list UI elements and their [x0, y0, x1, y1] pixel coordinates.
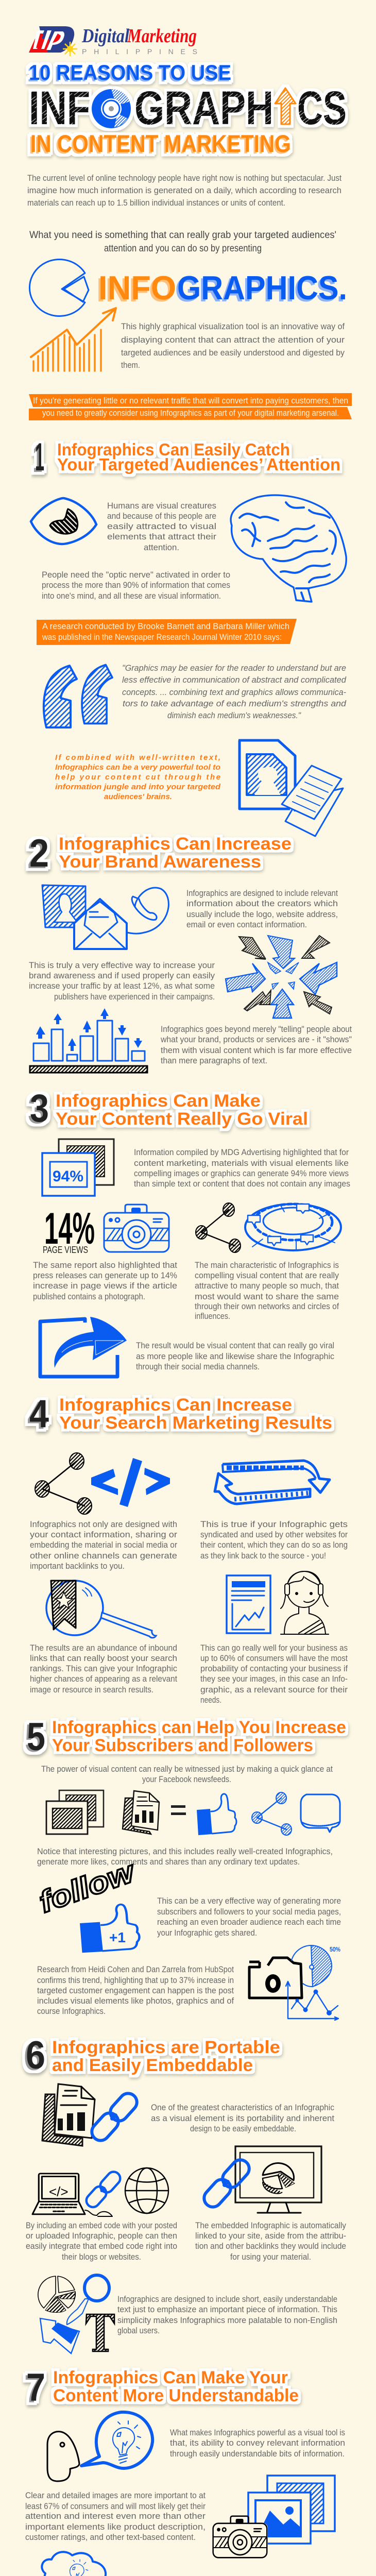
text: main characteristic: The main characteristic of Infographics is — [195, 1260, 339, 1270]
text: 67% of consumers: important elements like product description, — [25, 2522, 206, 2532]
text: goes beyond telling: Infographics goes beyond merely "telling" people about — [161, 1024, 352, 1034]
icon: share nodes — [35, 1453, 92, 1514]
text: optic nerve: process the more than 90% of information that comes — [42, 580, 230, 590]
text: 60% of consumers — [200, 1643, 348, 1705]
icon: blue line chart — [286, 1981, 338, 2020]
heading 3: Infographics Can Make — [56, 1091, 261, 1111]
text: automatically linked: tion and other backlinks they would include — [195, 2241, 346, 2251]
orange ribbon callout: If you're generating little or no relevant traffic that will convert into paying customers, then — [33, 396, 348, 405]
text: subscribers and followers: subscribers and followers to your social media pages, — [157, 1907, 341, 1917]
text: 60% of consumers: graphic, as a relevant source for their — [200, 1685, 348, 1694]
orange emphasis text: information jungle and into your targeted — [55, 783, 221, 791]
text: main characteristic: compelling visual content that are really — [195, 1270, 339, 1280]
icon: magnifier and bookmark — [46, 1581, 156, 1638]
number 4: 4 — [29, 1392, 49, 1436]
heading 7 — [53, 2368, 299, 2405]
heading 2: Your Brand Awareness — [59, 852, 261, 872]
text: humans are visual: easily attracted to visual — [107, 521, 216, 531]
section 3 — [30, 1087, 350, 1377]
text: relevant information: information about the creators which — [186, 899, 338, 908]
number 2: 2 — [29, 832, 49, 875]
text: research Heidi Cohen: confirms this trend, highlighting that up to 37% increase in — [37, 1975, 234, 1985]
text: brand awareness: brand awareness and if used properly can easily — [29, 971, 215, 980]
title line 3: IN CONTENT MARKETING — [30, 130, 291, 157]
heading 4: Infographics Can Increase — [59, 1395, 292, 1415]
icon: speech bubble with bulb — [81, 2412, 152, 2468]
text: embed code: or uploaded Infographic, people can then — [26, 2231, 177, 2241]
icon: chain link small — [83, 2169, 123, 2210]
text: press releases: increase in page views if the article — [33, 1281, 177, 1291]
text: press releases: published contains a photograph. — [33, 1292, 145, 1301]
text: MDG advertising: than simple text or content that does not contain any images — [134, 1179, 350, 1189]
icon: pie, magnifier, arrow and T — [38, 2275, 114, 2353]
heading 5: Your Subscribers and Followers — [52, 1736, 313, 1755]
text: inbound links: higher chances of appearing as a relevant — [30, 1674, 177, 1684]
intro text: imagine how much information is generated on a daily, which according to research — [27, 185, 341, 195]
text: humans are visual — [107, 501, 216, 552]
section 4 — [29, 1392, 348, 1705]
text: powerful visual tool: that, its ability to convey relevant information — [170, 2438, 345, 2448]
icon: 94% picture frames: 94% — [53, 1168, 83, 1185]
text: go viral result: The result would be visual content that can really go viral — [136, 1341, 334, 1350]
heading 3: Your Content Really Go Viral — [56, 1109, 308, 1129]
icon: thumbs up plus one — [80, 1905, 139, 1953]
stat: 14% page views: PAGE VIEWS — [43, 1245, 88, 1255]
text: backlinks: important backlinks to you. — [30, 1561, 125, 1571]
text: press releases: The same report also highlighted that — [33, 1260, 177, 1270]
text: MDG advertising: content marketing, materials with visual elements like — [134, 1158, 349, 1168]
text: portability: design to be easily embeddable. — [190, 2124, 296, 2133]
text: main characteristic: most would want to share the same — [195, 1292, 339, 1301]
stat: 14% page views: 14% — [44, 1204, 95, 1253]
heading 6 — [52, 2038, 280, 2075]
icon: follow lettering: follow — [35, 1854, 141, 1919]
title line 2: INFOGRAPHICS with icons: GRAPH — [134, 82, 274, 134]
logo: Digital Marketing Philippines — [29, 25, 197, 56]
text: 60% of consumers: This can go really well for your business as — [200, 1643, 348, 1653]
heading 2 — [59, 834, 292, 872]
text: powerful visual tool: through easily understandable bits of information. — [170, 2449, 345, 2459]
quote text: "Graphics may be easier for the reader to understand but are — [122, 663, 346, 673]
text: embed code: easily integrate that embed code right into — [26, 2241, 177, 2251]
heading 3 — [56, 1091, 308, 1129]
icon: code brackets — [91, 1458, 170, 1507]
definition text: targeted audiences and be easily understood and digested by — [121, 348, 345, 358]
text: go viral result: as more people like and likewise share the Infographic — [136, 1351, 334, 1361]
icon: document and sheets — [238, 740, 343, 836]
text: press releases — [33, 1260, 177, 1301]
heading: INFOGRAPHICS. — [98, 269, 347, 307]
text: brand awareness: increase your traffic by at least 12%, as what some — [29, 981, 215, 991]
heading 5 — [52, 1718, 346, 1755]
text: humans are visual: and because of this people are — [107, 511, 216, 521]
text: visual content power — [41, 1764, 333, 1784]
text: likes comments shares — [37, 1846, 333, 1867]
lead-in text — [29, 230, 336, 254]
icon: hatched pie chart — [29, 259, 89, 316]
text: syndicated: their content, which they can do so as long — [200, 1540, 348, 1550]
icon: speech bubble — [301, 1794, 340, 1832]
icon: chain link — [88, 2090, 141, 2144]
heading: INFOGRAPHICS.: GRAPHICS. — [177, 269, 347, 307]
icon: half pie 50% — [292, 1945, 340, 1987]
text: main characteristic — [195, 1260, 339, 1321]
icon: shopping bag — [249, 1958, 302, 1998]
heading 6: and Easily Embeddable — [52, 2056, 253, 2075]
text: syndicated — [200, 1519, 348, 1561]
heading 7: Content More Understandable — [53, 2386, 299, 2405]
text: subscribers and followers: This can be a very effective way of generating more — [157, 1896, 341, 1906]
text: subscribers and followers: reaching an even broader audience reach each time — [157, 1917, 341, 1927]
orange ribbon callout — [29, 393, 352, 420]
text: 60% of consumers: up to 60% of consumers will have the most — [200, 1653, 348, 1663]
text: backlinks — [30, 1519, 177, 1571]
text: portability: One of the greatest characteristics of an Infographic — [151, 2103, 334, 2112]
text: powerful visual tool — [170, 2428, 345, 2459]
text: short understandable: simplicity makes Infographics more palatable to non-English — [117, 2315, 337, 2325]
icon: globe — [125, 2168, 168, 2213]
text: 67% of consumers: attention and interest even more than other — [25, 2511, 206, 2521]
icon: half pie 50%: 50% — [330, 1945, 340, 1953]
heading 1 — [57, 440, 340, 474]
text: optic nerve: People need the "optic nerve" activated in order to — [42, 570, 230, 580]
text: portability: as a visual element is its portability and inherent — [151, 2113, 334, 2123]
icon: report and support agent — [227, 1571, 329, 1634]
text: brand awareness: publishers have experienced in their campaigns. — [54, 992, 215, 1002]
text: go viral result: through their social media channels. — [136, 1362, 260, 1371]
quote text: diminish each medium's weaknesses." — [167, 710, 301, 720]
icon: thumbs up plus one: +1 — [109, 1929, 126, 1945]
text: 60% of consumers: they see your images, in this case an Info- — [200, 1674, 348, 1684]
text: 60% of consumers: probability of contacting your business if — [200, 1664, 348, 1673]
orange ribbon callout: you need to greatly consider using Infographics as part of your digital marketing arsenal. — [42, 408, 339, 418]
text: syndicated: as they link back to the source - you! — [200, 1551, 326, 1561]
text: goes beyond telling: them with visual content which is far more effective — [161, 1045, 352, 1055]
text: main characteristic: attractive to many people so much, that — [195, 1281, 339, 1291]
stat: 14% page views — [43, 1204, 95, 1255]
orange emphasis text — [55, 753, 221, 801]
definition text: them. — [121, 360, 140, 370]
text: research Heidi Cohen: includes visual elements like photos, graphics and of — [37, 1996, 234, 2006]
title line 2: INFOGRAPHICS with icons — [29, 82, 347, 134]
text: brand awareness — [29, 960, 215, 1002]
icon: contact card, envelope, phone — [42, 885, 168, 949]
heading 2: Infographics Can Increase — [59, 834, 292, 854]
text: main characteristic: through their own networks and circles of — [195, 1301, 339, 1311]
text: research Heidi Cohen: Research from Heidi Cohen and Dan Zarrela from HubSpot — [37, 1964, 234, 1974]
equals sign — [171, 1805, 186, 1815]
text: go viral result — [136, 1341, 334, 1371]
text: brand awareness: This is truly a very effective way to increase your — [29, 960, 215, 970]
number 7: 7 — [26, 2366, 45, 2410]
heading 4: Your Search Marketing Results — [59, 1413, 332, 1433]
text: automatically linked: for using your material. — [230, 2252, 311, 2262]
section 1: 1 — [35, 435, 44, 479]
text: likes comments shares: Notice that interesting pictures, and this includes really well-created Infographics, — [37, 1846, 333, 1856]
title line 1: 10 REASONS TO USE — [29, 60, 231, 84]
text: MDG advertising — [134, 1147, 350, 1189]
text: relevant information: usually include the logo, website address, — [186, 909, 338, 919]
text: 60% of consumers: needs. — [200, 1695, 221, 1705]
text: 67% of consumers — [25, 2490, 206, 2542]
text: goes beyond telling — [160, 1024, 352, 1065]
text: inbound links: links that can really boost your search — [30, 1653, 177, 1663]
lead-in text: What you need is something that can really grab your targeted audiences' — [29, 230, 336, 241]
icon: laptop with code — [32, 2174, 112, 2216]
icon: document — [42, 2084, 95, 2146]
title line 2: INFOGRAPHICS with icons: INF — [29, 82, 90, 134]
number 5: 5 — [27, 1715, 45, 1759]
icon: orange rising chart — [31, 308, 116, 371]
text: backlinks: other online channels can generate — [30, 1551, 177, 1561]
orange research callout — [37, 619, 297, 645]
definition text: This highly graphical visualization tool is an innovative way of — [121, 321, 345, 331]
intro text: materials can reach up to 1.5 billion individual instances or units of content. — [27, 198, 285, 208]
text: 67% of consumers: least 67% of consumers and will most likely get their — [25, 2501, 206, 2511]
icon: converging arrows — [226, 936, 337, 1018]
text: humans are visual: Humans are visual creatures — [107, 501, 216, 511]
icon: 94% picture frames — [42, 1139, 114, 1196]
orange emphasis text: help your content cut through the — [55, 773, 220, 782]
text: inbound links: The results are an abundance of inbound — [30, 1643, 177, 1653]
icon: loop arrows — [215, 1461, 330, 1504]
section 1 — [31, 435, 347, 836]
number 6: 6 — [26, 2033, 45, 2077]
icon: black camera — [212, 2516, 268, 2558]
icon: picture frames — [46, 1790, 104, 1834]
intro text — [27, 173, 341, 208]
text: inbound links: rankings. This can give your Infographic — [30, 1664, 177, 1673]
definition text — [121, 321, 345, 370]
orange emphasis text: Infographics can be a very powerful tool to — [55, 763, 220, 772]
icon: head profile — [47, 2432, 79, 2481]
heading: INFOGRAPHICS.: INFO — [98, 269, 176, 307]
text: backlinks: embedding the material in social media or — [30, 1540, 177, 1550]
quote text: less effective in communication of abstract and complicated — [122, 675, 347, 685]
text: goes beyond telling: than mere paragraphs of text. — [161, 1056, 267, 1065]
orange research callout: was published in the Newspaper Research Journal Winter 2010 says: — [42, 632, 282, 642]
icon: thumbs up — [197, 1794, 236, 1835]
text: MDG advertising: Information compiled by MDG Advertising highlighted that for — [134, 1147, 349, 1157]
icon: two heads sharing idea — [32, 2552, 122, 2576]
text: goes beyond telling: what your brand, products or services are - it "shows" — [160, 1035, 352, 1044]
text: MDG advertising: compelling images or graphics can generate 94% more views — [134, 1168, 349, 1178]
icon: film ring network — [245, 1204, 341, 1250]
text: backlinks: Infographics not only are designed with — [30, 1519, 177, 1529]
quote text: tors to take advantage of each medium's strengths and — [123, 699, 347, 708]
icon: quote marks — [44, 665, 112, 727]
number 3: 3 — [30, 1087, 49, 1130]
text: visual content power: The power of visual content can really be witnessed just by making a quick glance at — [41, 1764, 333, 1774]
text: inbound links: image or resource in search results. — [30, 1685, 153, 1694]
text: relevant information — [186, 888, 338, 929]
text: research Heidi Cohen: course Infographics. — [37, 2006, 106, 2016]
heading 5: Infographics can Help You Increase — [52, 1718, 346, 1737]
text: short understandable: Infographics are designed to include short, easily understandable — [117, 2294, 337, 2304]
orange emphasis text: audiences' brains. — [104, 792, 172, 801]
text: syndicated: This is true if your Infographic gets — [200, 1519, 348, 1529]
heading 1: Your Targeted Audiences’ Attention — [57, 455, 340, 474]
icon: document with bars — [123, 1791, 159, 1834]
heading 7: Infographics Can Make Your — [53, 2368, 288, 2387]
icon: laptop with code: </> — [49, 2184, 69, 2199]
title — [29, 60, 347, 157]
heading 1: Infographics Can Easily Catch — [57, 440, 290, 459]
text: syndicated: syndicated and used by other websites for — [200, 1530, 348, 1539]
icon: monitor with pie — [235, 2146, 321, 2213]
text: inbound links — [30, 1643, 177, 1694]
text: main characteristic: influences. — [195, 1311, 230, 1321]
text: relevant information: email or even contact information. — [186, 920, 307, 929]
icon: blue picture frames — [248, 2476, 335, 2544]
definition text: displaying content that can attract the attention of your — [121, 335, 345, 345]
text: research Heidi Cohen — [37, 1964, 234, 2016]
text: short understandable: text just to emphasize an important piece of information. This — [117, 2304, 337, 2314]
icon: brain — [231, 495, 346, 602]
icon: share arrow — [40, 1317, 127, 1377]
text: likes comments shares: generate more likes, comments and shares than any ordinary text updates. — [37, 1857, 300, 1867]
icon: blue camera — [104, 1205, 169, 1252]
quote text: concepts. ... combining text and graphics allows communica- — [122, 687, 346, 697]
quote text — [122, 663, 347, 720]
section 5 — [27, 1715, 346, 2020]
text: portability — [151, 2103, 334, 2133]
orange emphasis text: If combined with well-written text, — [55, 753, 220, 762]
icon: blue share — [252, 1792, 292, 1835]
icon: eye — [31, 498, 96, 544]
text: 67% of consumers: Clear and detailed images are more important to at — [25, 2490, 206, 2500]
text: short understandable — [117, 2294, 337, 2335]
text: backlinks: your contact information, sharing or — [30, 1530, 177, 1539]
text: embed code: their blogs or websites. — [62, 2252, 141, 2262]
orange research callout: A research conducted by Brooke Barnett and Barbara Miller which — [42, 621, 289, 631]
text: powerful visual tool: What makes Infographics powerful as a visual tool is — [170, 2428, 345, 2437]
section 6 — [26, 2033, 346, 2353]
heading 6: Infographics are Portable — [52, 2038, 280, 2057]
section 7 — [25, 2366, 345, 2576]
icon: share nodes — [196, 1203, 241, 1252]
lead-in text: attention and you can do so by presenting — [104, 243, 262, 254]
text: research Heidi Cohen: targeted customer engagement can happen is the post — [37, 1986, 234, 1995]
text: subscribers and followers — [157, 1896, 341, 1938]
text: press releases: press releases can generate up to 14% — [33, 1270, 177, 1280]
text: humans are visual: attention. — [144, 543, 179, 552]
title line 2: INFOGRAPHICS with icons: CS — [297, 82, 347, 134]
section 2 — [29, 832, 352, 1073]
text: automatically linked: The embedded Infographic is automatically — [195, 2221, 346, 2230]
text: optic nerve: into one's mind, and all these are visual information. — [42, 591, 221, 601]
text: automatically linked — [195, 2221, 346, 2262]
icon: chain link large — [200, 2156, 253, 2211]
text: embed code — [26, 2221, 177, 2262]
text: automatically linked: linked to your site, aside from the attribu- — [195, 2231, 346, 2241]
text: short understandable: global users. — [117, 2326, 160, 2335]
text: visual content power: your Facebook newsfeeds. — [142, 1774, 231, 1784]
text: humans are visual: elements that attract their — [107, 532, 216, 541]
text: relevant information: Infographics are designed to include relevant — [186, 888, 338, 898]
text: optic nerve — [42, 570, 230, 601]
icon: bars with arrows — [30, 1008, 147, 1073]
intro text: The current level of online technology people have right now is nothing but spectacular. Just — [27, 173, 341, 183]
text: 67% of consumers: customer ratings, and other text-based content. — [25, 2532, 196, 2542]
icon: eye dot — [60, 2443, 64, 2447]
text: embed code: By including an embed code with your posted — [26, 2221, 177, 2230]
heading 4 — [59, 1395, 332, 1433]
text: subscribers and followers: your Infographic gets shared. — [157, 1928, 257, 1938]
